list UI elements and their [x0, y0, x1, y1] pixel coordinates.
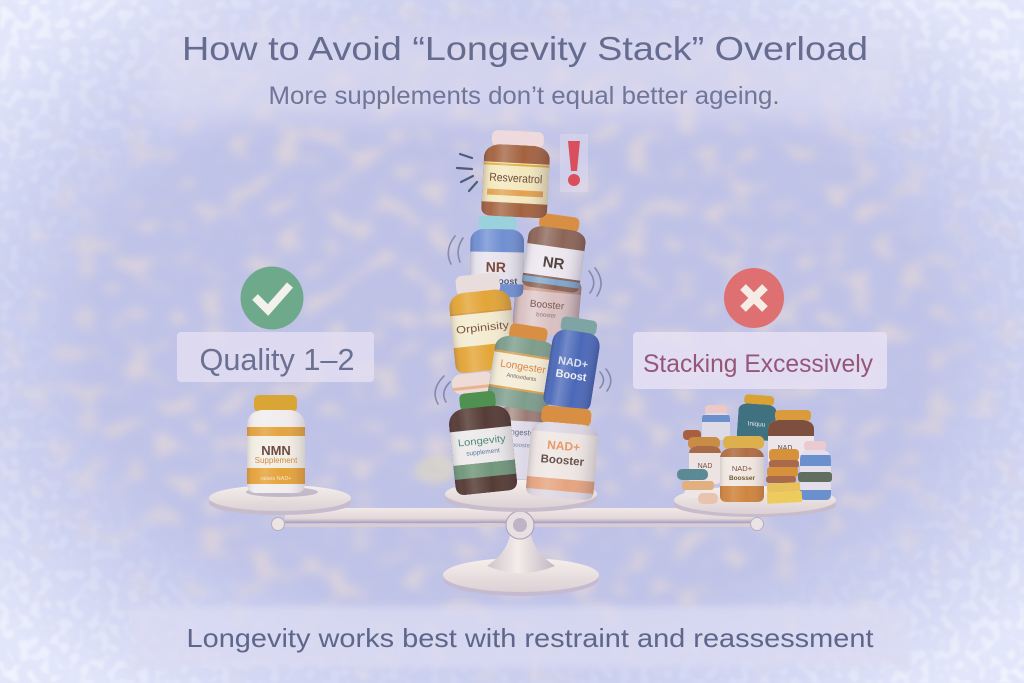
- bottle: brown NR: NR: [542, 253, 566, 273]
- label: Stacking Excessively: [633, 332, 887, 389]
- wobble marks around stack: [435, 154, 611, 404]
- title: How to Avoid “Longevity Stack” Overload: [182, 30, 868, 67]
- scale stand: [443, 511, 599, 596]
- pills: yellow: [767, 482, 802, 504]
- bottle: back lower bottle: booster: [512, 443, 532, 450]
- pills: left stack: [677, 469, 718, 504]
- bottle: pale booster: Booster: [529, 299, 565, 313]
- bottle: green Longester: Antioxidants: [506, 373, 537, 383]
- stack of bottles: [446, 129, 604, 501]
- left plate: [209, 485, 351, 515]
- jar: central NAD+ Booster: [720, 436, 764, 502]
- stacked discs: orange: [766, 449, 799, 483]
- jar: brown: [768, 410, 814, 465]
- jar: central NAD+ Booster: Boosser: [729, 475, 755, 482]
- scale beam: [272, 508, 764, 530]
- bottle: blue NAD+ Boost: NAD+: [557, 355, 589, 371]
- jar: teal: Iniquu: [747, 420, 766, 429]
- label: Quality 1-2: [177, 332, 374, 382]
- bottle: brown NR: [521, 211, 589, 294]
- bottle: blue NAD+ Boost: [544, 316, 600, 410]
- label: Stacking Excessively: Stacking Excessively: [643, 350, 873, 378]
- bottle: Resveratrol with cream label: Resveratrol: [489, 172, 543, 186]
- bottle: dark Longevity: supplement: [466, 447, 500, 458]
- pill: brown: [683, 430, 701, 440]
- jar: left brown: NAD: [698, 463, 712, 470]
- jar: teal: [736, 394, 777, 441]
- bottle: green Longester: [488, 323, 552, 412]
- icon: red cross: [724, 268, 784, 328]
- jar: left brown: [688, 437, 721, 484]
- bottle: NMN supplement: Supplement: [255, 456, 298, 465]
- bottle: NAD+ Booster: [525, 404, 601, 501]
- bottle: orange Orpinisity: [449, 272, 513, 373]
- bottle: NMN supplement: raises NAD+: [260, 476, 292, 482]
- bottle pile on right plate: [677, 394, 832, 504]
- bottle: blue NR: [469, 216, 525, 297]
- bottle: back lower bottle: [503, 406, 544, 479]
- balance scale: [209, 480, 836, 596]
- bottle: orange Orpinisity: Orpinisity: [456, 319, 510, 337]
- closing message: Longevity works best with restraint and reassessment: [186, 623, 874, 653]
- bottle: blue NR: NR: [486, 259, 506, 275]
- bottle: back lower bottle: Ingester: [508, 427, 538, 438]
- bottle: dark Longevity: Longevity: [457, 434, 506, 449]
- bottle: dark Longevity: [446, 389, 518, 496]
- bottle: blue NR: Boost: [492, 276, 517, 286]
- alert: exclamation mark: [560, 134, 588, 192]
- panel: quality, good choice: [177, 266, 374, 382]
- bottle: blue NAD+ Boost: Boost: [555, 367, 588, 384]
- bottle: pale booster: [512, 284, 582, 336]
- jar: brown: NAD: [778, 445, 792, 452]
- subtitle: More supplements don’t equal better ageing.: [268, 82, 780, 110]
- icon: green check: [240, 266, 304, 330]
- center plate: [445, 480, 597, 512]
- jar: central NAD+ Booster: NAD+: [732, 464, 753, 473]
- bottle: NAD+ Booster: Booster: [540, 453, 585, 469]
- bottle: NMN supplement: NMN: [261, 443, 291, 458]
- bottle: green Longester: Longester: [499, 357, 547, 377]
- right plate: [674, 486, 836, 517]
- jar: small blue: [702, 405, 730, 440]
- bottle: pale lying pill: [451, 371, 495, 395]
- bottle: NMN supplement: [246, 395, 318, 497]
- bottle: NAD+ Booster: NAD+: [547, 438, 581, 454]
- bottle: Resveratrol with cream label: [481, 129, 551, 219]
- panel: stacking excessively, bad choice: [633, 268, 887, 389]
- bottle: pale booster: booster: [536, 312, 556, 320]
- jar: right blue: [798, 441, 832, 500]
- label: Quality 1-2: Quality 1–2: [200, 342, 354, 377]
